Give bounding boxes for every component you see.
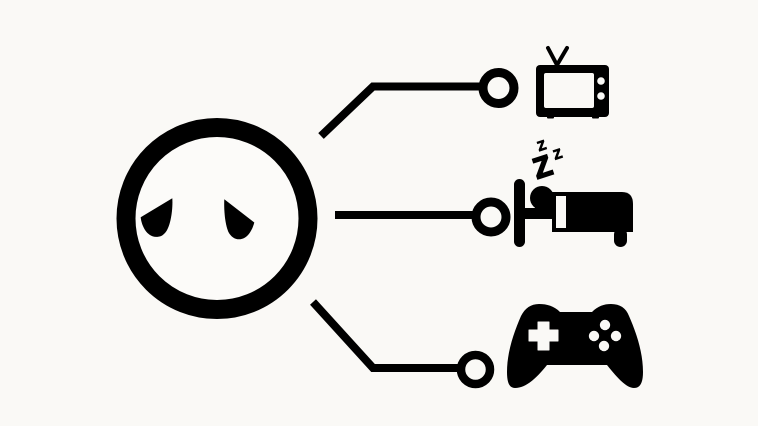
sleep letters: Z [535,137,548,154]
sleep letters [529,137,564,186]
connector: face to sleep [335,202,506,232]
icon: game controller [507,304,643,388]
sleep letters: Z [551,146,564,163]
connector: face to TV [321,72,514,136]
icon: person sleeping in bed [514,137,633,247]
connector: face to video games [313,302,490,384]
icon: sad face [126,128,308,310]
icon: television [536,48,609,118]
sleep letters: Z [529,150,556,186]
